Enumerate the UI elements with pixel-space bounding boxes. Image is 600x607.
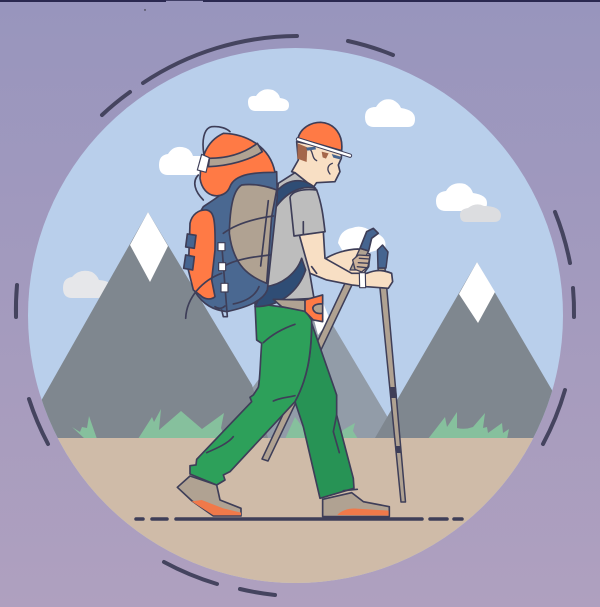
lower strap — [255, 258, 306, 307]
boot: front — [323, 493, 389, 517]
clouds — [159, 89, 487, 255]
back strap — [275, 181, 316, 208]
pack lid — [200, 133, 275, 196]
side straps — [186, 234, 196, 248]
trouser leg: rear — [190, 303, 312, 485]
far hand — [325, 228, 378, 277]
arm near — [299, 232, 393, 288]
torso shirt — [267, 173, 325, 300]
wrist band — [359, 273, 366, 288]
ground line — [136, 517, 462, 521]
boot: rear — [177, 476, 241, 516]
sky — [28, 48, 563, 583]
sleeve — [290, 190, 325, 236]
scene circle — [28, 48, 563, 583]
belt — [273, 299, 307, 312]
upper body — [184, 122, 393, 322]
helmet — [298, 122, 350, 156]
tan panel — [229, 184, 277, 283]
backpack body — [190, 172, 277, 312]
snow caps — [130, 212, 168, 282]
hip pouch — [305, 295, 323, 322]
cords — [186, 127, 273, 318]
near pole — [378, 245, 406, 502]
ground — [58, 438, 533, 583]
toggles — [197, 154, 228, 292]
head — [292, 142, 342, 187]
trouser leg: front — [295, 323, 354, 498]
lower body — [177, 303, 389, 517]
grass — [72, 409, 509, 439]
side pocket — [188, 210, 215, 299]
mountains — [252, 320, 388, 438]
hiking pole: far — [262, 262, 361, 461]
